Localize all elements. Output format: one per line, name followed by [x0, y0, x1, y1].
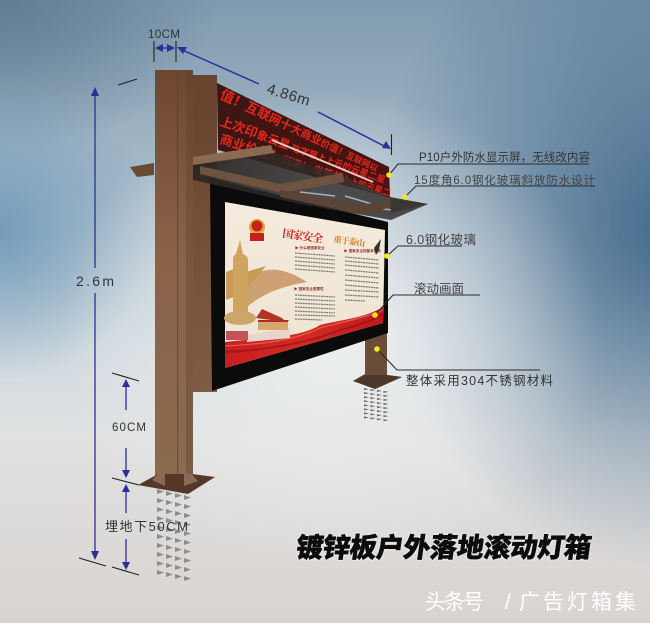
huabiao column [224, 240, 266, 325]
dimension: buried 50CM: 埋地下50CM [105, 519, 188, 534]
dimension: 60CM: 60CM [112, 422, 146, 434]
dimension: 4.86m: 4.86m [265, 81, 312, 110]
spikes: left post footing [157, 489, 191, 581]
watermark: / [499, 591, 517, 614]
dimension: 2.6m: 2.6m [76, 273, 114, 289]
dimension: buried 50CM [105, 484, 188, 575]
callout: stainless steel: 整体采用304不锈钢材料 [406, 373, 553, 388]
dimension: 2.6m [76, 79, 137, 566]
display panel [224, 202, 385, 368]
dimension: 10CM: 10CM [148, 29, 180, 41]
panel section headings: ▶ 国家安全重要性 [294, 286, 324, 291]
panel section headings: ▶ 什么是国家安全 [295, 245, 325, 250]
callout: tempered glass: 6.0钢化玻璃 [406, 233, 476, 247]
left canopy stub [130, 163, 154, 177]
canopy support arms [193, 145, 391, 215]
leader lines and callout dots [372, 164, 595, 370]
canopy highlight [272, 140, 373, 182]
dimension: 10CM [148, 29, 180, 62]
bird icon [374, 239, 381, 255]
panel title [281, 225, 366, 249]
LED text rows: 上次印象云星 吃字幕上上云的云星二星 [219, 116, 386, 184]
main title: 镀锌板户外落地滚动灯箱 [294, 532, 593, 563]
panel title: 重于泰山 [333, 233, 366, 249]
spikes: right post footing [364, 388, 388, 421]
callout: scrolling picture: 滚动画面 [414, 281, 464, 296]
LED text rows: 值！互联网十大商业价值！互联网以 [220, 88, 378, 172]
callout: tempered glass angle: 15度角6.0钢化玻璃斜放防水设计 [414, 173, 596, 187]
panel title: 国家安全 [281, 225, 324, 247]
Tiananmen illustration [226, 309, 290, 342]
base plate [138, 474, 215, 494]
red wave [225, 307, 383, 368]
LED display screen [217, 83, 390, 198]
panel section headings [294, 245, 381, 291]
watermark: 广告灯箱集 [519, 591, 636, 614]
main title: 镀锌板户外落地滚动灯箱 [294, 532, 593, 563]
main front post [155, 70, 193, 478]
light box frame [210, 178, 388, 391]
canopy glass [193, 152, 428, 220]
orange swirl [243, 270, 307, 306]
rear post section [193, 75, 217, 392]
watermark: 头条号 [425, 591, 484, 614]
dimension: 60CM [112, 373, 146, 485]
panel body text block [295, 253, 379, 320]
callout: LED screen: P10户外防水显示屏，无线改内容 [419, 150, 590, 164]
dimension: 4.86m [177, 47, 392, 155]
panel section headings: ▶ 国家安全的基本任务 [344, 248, 381, 253]
right support post [353, 328, 402, 389]
national emblem [249, 219, 265, 241]
